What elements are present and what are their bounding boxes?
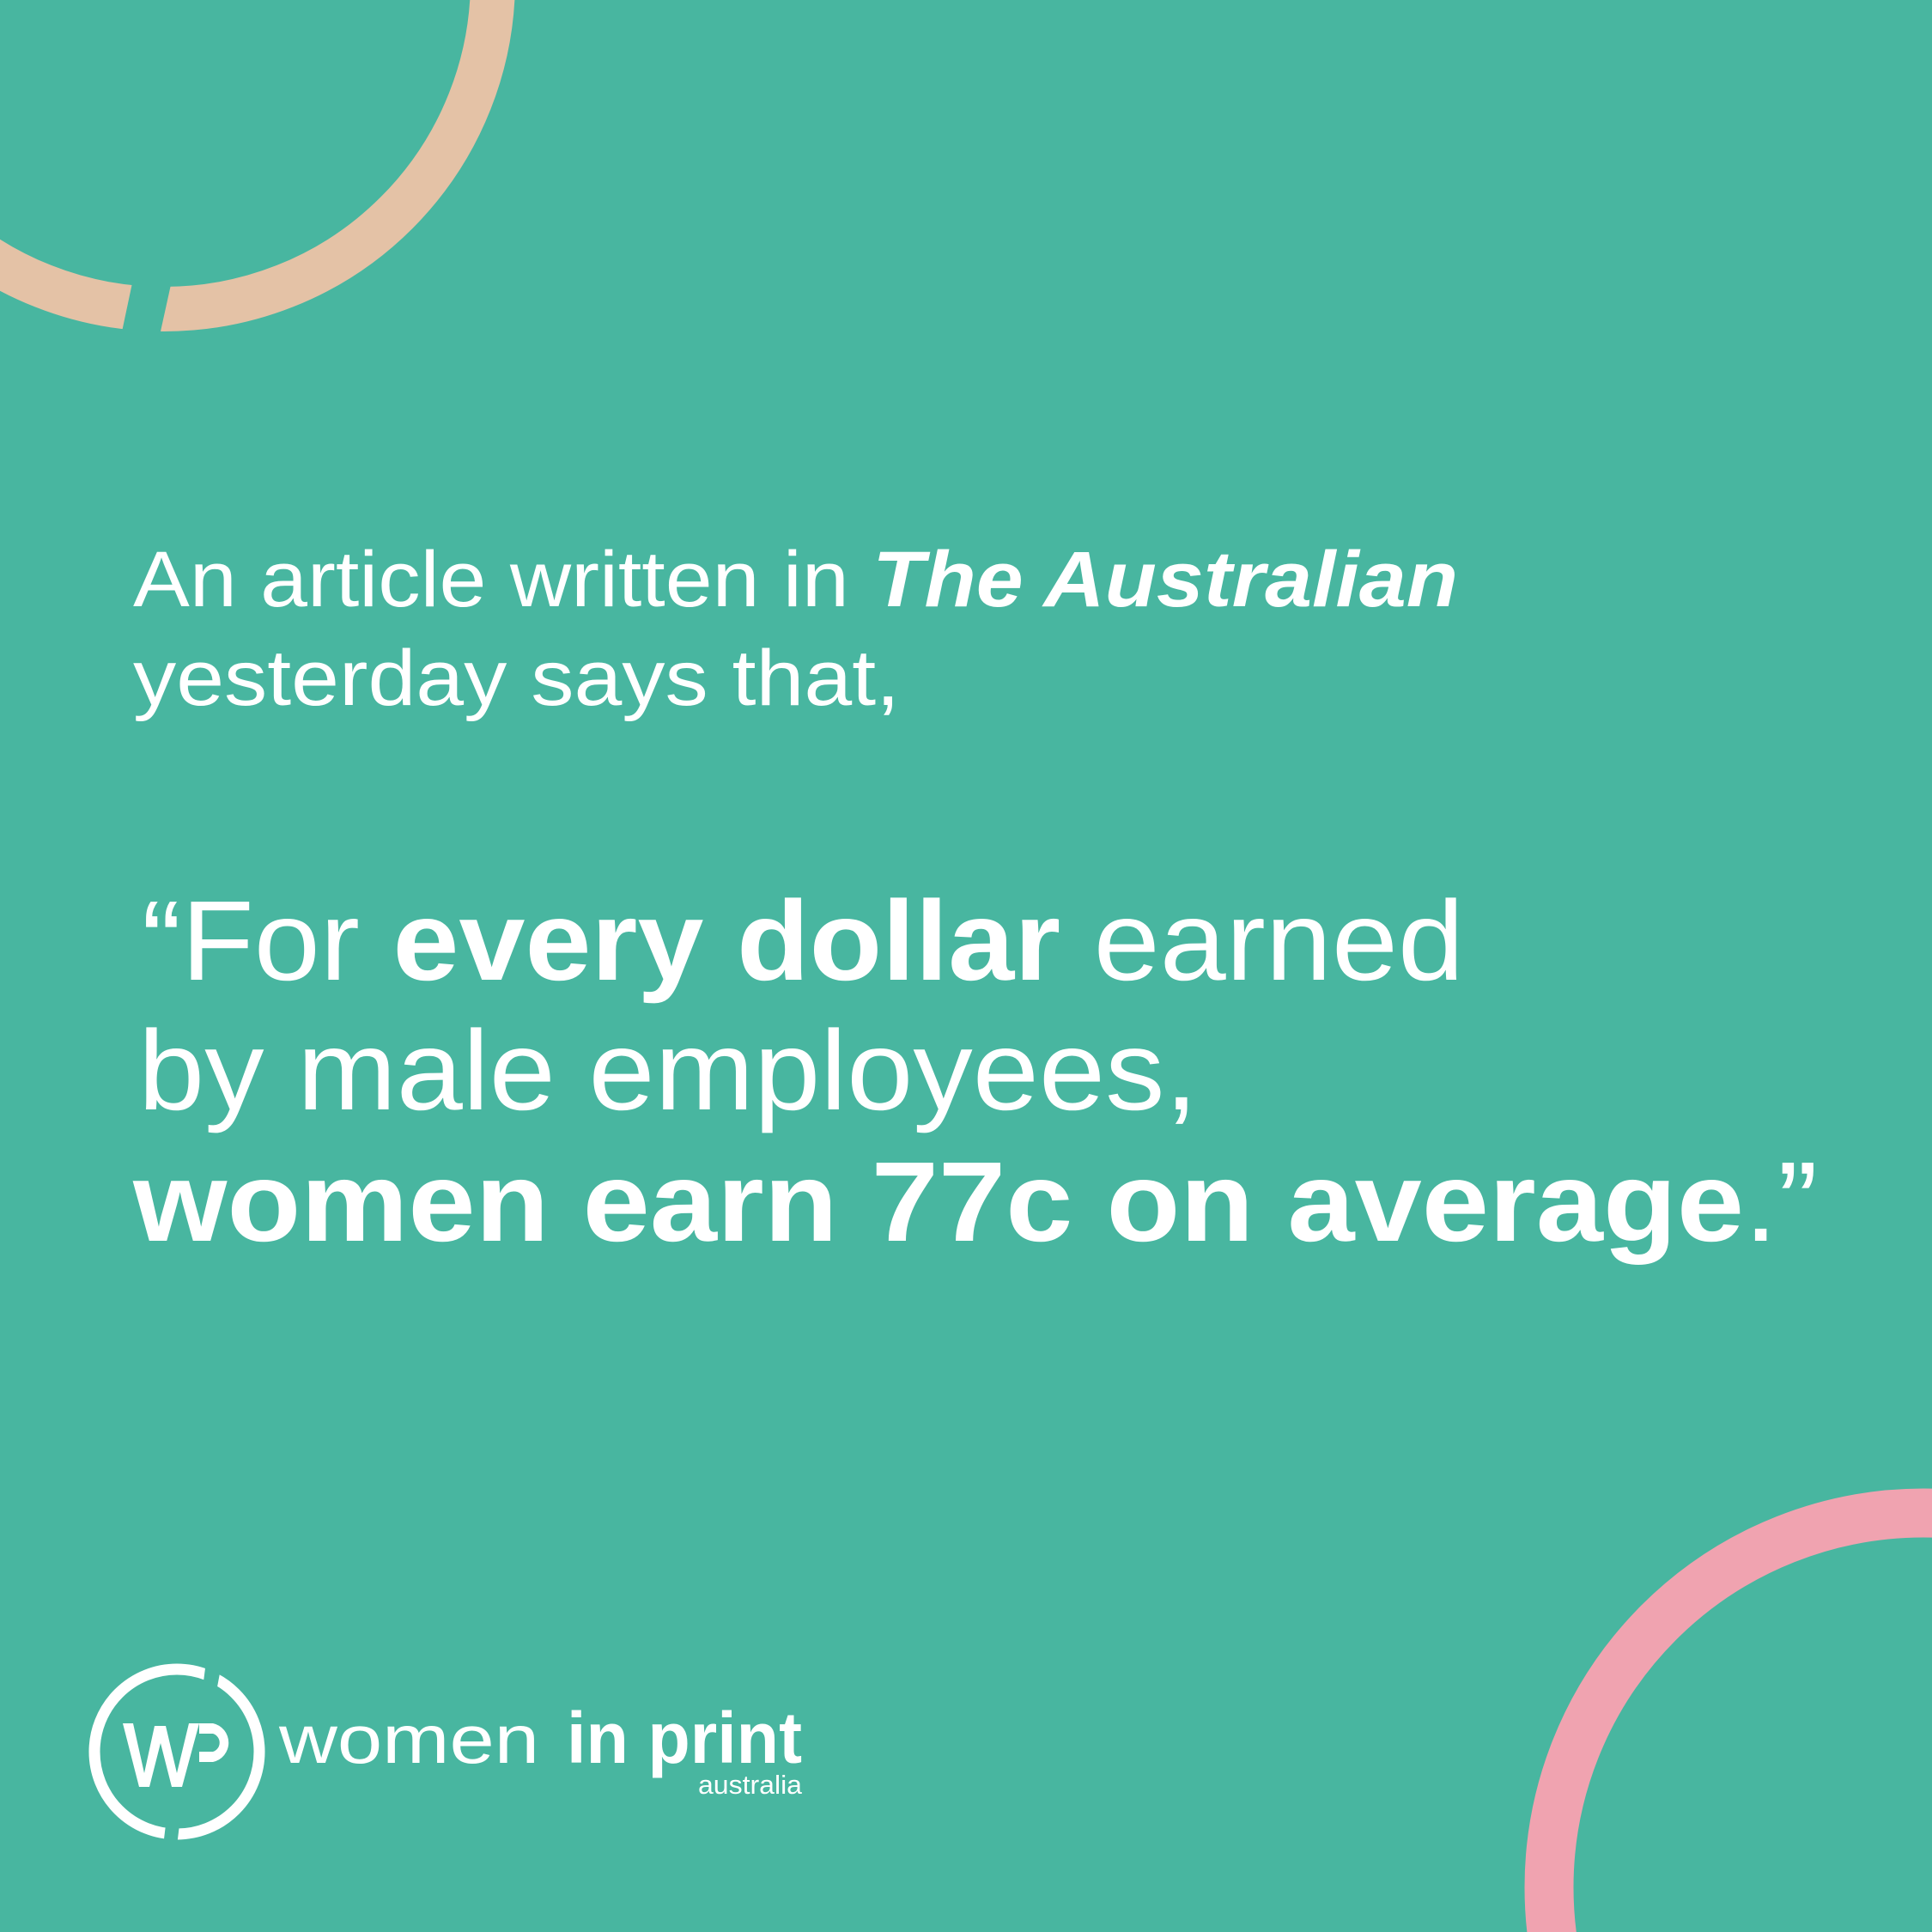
logo wordmark: women [278, 1701, 539, 1777]
quote [132, 878, 1818, 1265]
intro text: An article written in The Australian [133, 536, 1458, 623]
decorative peach ring top-left [0, 0, 493, 339]
logo: women in print australia: australia [698, 1770, 803, 1800]
decorative pink ring bottom-right [1549, 1513, 1932, 1932]
quote: women earn 77c on average .” [132, 1139, 1818, 1265]
intro text: yesterday says that, [133, 635, 900, 722]
quote: “For every dollar earned [142, 878, 1464, 1004]
logo: women in print australia [94, 1662, 803, 1846]
intro text [133, 536, 1458, 722]
icon: WP ring [94, 1662, 259, 1846]
logo: women in print australia: in print [567, 1698, 802, 1778]
quote: by male employees, [138, 1007, 1198, 1133]
